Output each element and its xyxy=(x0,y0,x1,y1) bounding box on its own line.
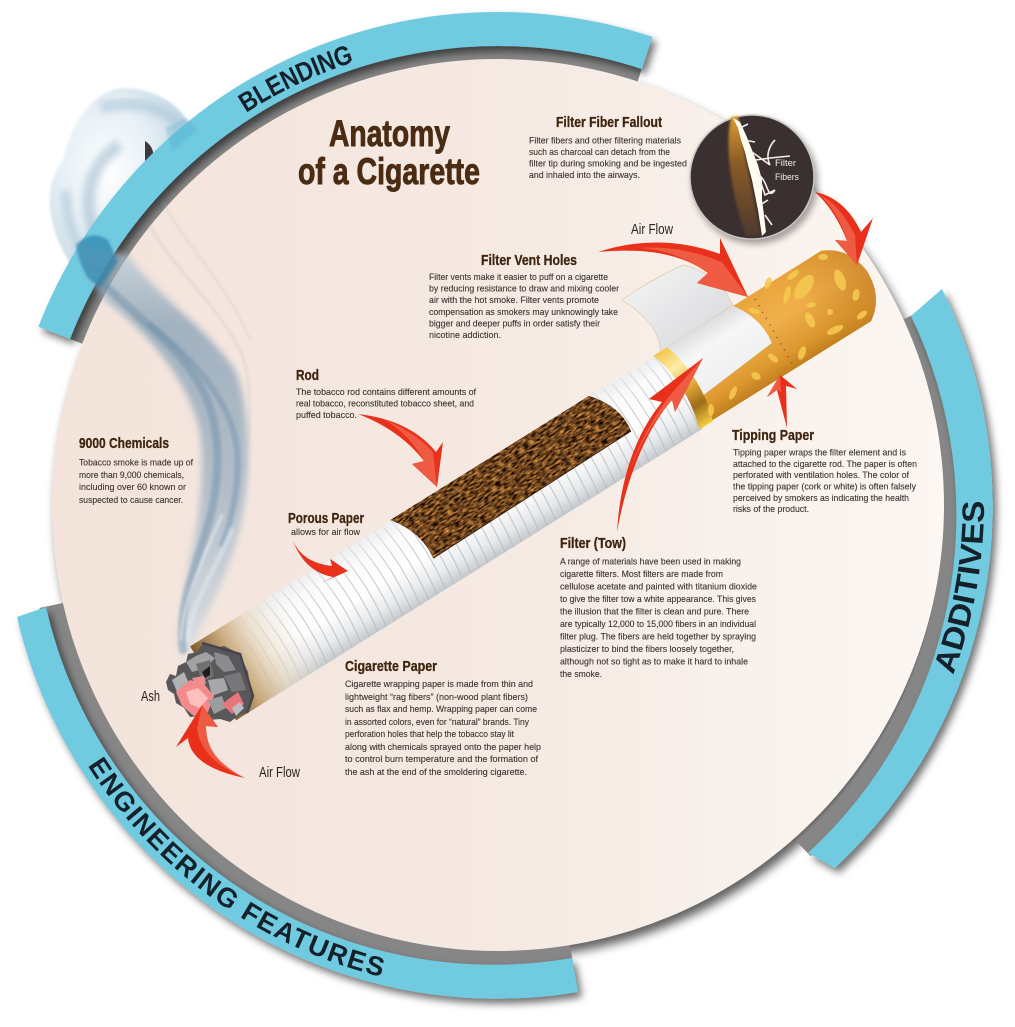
heading and text: filter fiber fallout: filter tip during smoking and be ingested xyxy=(529,158,687,170)
smoke column xyxy=(78,245,248,655)
heading and text: filter fiber fallout: Filter Fiber Fallout xyxy=(556,114,662,131)
heading and text: cigarette paper: Cigarette wrapping paper is made from thin and xyxy=(345,679,533,690)
heading and text: tipping paper xyxy=(732,427,917,515)
label: air flow top: Air Flow xyxy=(631,222,673,238)
filter fibers label: Filter xyxy=(775,158,796,169)
heading and text: filter tow: filter plug. The fibers are held together by spraying xyxy=(560,632,756,642)
heading and text: tipping paper: perforated with ventilation holes. The color of xyxy=(733,470,909,481)
heading and text: rod: real tobacco, reconstituted tobacco sheet, and xyxy=(296,398,474,410)
heading and text: filter tow: Filter (Tow) xyxy=(560,535,626,552)
heading and text: filter tow xyxy=(560,535,757,680)
heading and text: rod xyxy=(296,367,476,421)
exposed tobacco xyxy=(391,386,633,567)
heading and text: filter tow: although not so tight as to make it hard to inhale xyxy=(560,656,748,668)
title: Anatomy xyxy=(329,113,450,154)
band label: engineering features: ENGINEERING FEATURES xyxy=(88,756,384,976)
heading and text: cigarette paper xyxy=(345,658,541,778)
band: engineering features xyxy=(17,607,578,999)
heading and text: 9000 chemicals: 9000 Chemicals xyxy=(79,435,169,452)
smoke over band xyxy=(76,235,118,288)
cigarette rod paper xyxy=(190,352,707,720)
heading and text: filter tow: to give the filter tow a white appearance. This gives xyxy=(560,594,756,605)
heading and text: filter fiber fallout: and inhaled into the airways. xyxy=(529,170,640,181)
arrow: rod xyxy=(358,414,443,487)
band label: additives: ADDITIVES xyxy=(936,502,984,674)
heading and text: 9000 chemicals: suspected to cause cancer. xyxy=(79,495,183,506)
arrow: air flow to vent holes xyxy=(598,238,748,297)
heading and text: filter vent holes: air with the hot smoke. Filter vents promote xyxy=(429,295,599,306)
gold band xyxy=(653,344,719,429)
heading and text: tipping paper: Tipping Paper xyxy=(732,427,814,444)
heading and text: filter vent holes: Filter Vent Holes xyxy=(481,252,577,269)
heading and text: 9000 chemicals: including over 60 known or xyxy=(79,482,187,493)
heading and text: filter fiber fallout: Filter fibers and other filtering materials xyxy=(529,136,681,146)
label: air flow bottom: Air Flow xyxy=(259,765,300,781)
heading and text: filter tow: the illusion that the filter is clean and pure. There xyxy=(560,606,749,618)
heading and text: filter tow: plasticizer to bind the fibers loosely together, xyxy=(560,644,734,655)
heading and text: 9000 chemicals: Tobacco smoke is made up of xyxy=(79,458,193,468)
arrow: porous paper xyxy=(293,541,348,583)
heading and text: cigarette paper: lightweight “rag fibers” (non-wood plant fibers) xyxy=(345,692,528,703)
heading and text: tipping paper: perceived by smokers as indicating the health xyxy=(733,493,909,504)
inset circle: filter fibers xyxy=(690,115,818,244)
white filter tow xyxy=(660,298,777,402)
smoke streaks xyxy=(105,205,250,650)
heading and text: porous paper xyxy=(288,510,364,538)
peeled tipping paper flap xyxy=(622,265,733,353)
heading and text: filter tow: cigarette filters. Most filters are made from xyxy=(560,569,723,580)
arrow: tipping paper xyxy=(767,375,797,428)
burnt ash tip xyxy=(166,643,253,722)
heading and text: 9000 chemicals: more than 9,000 chemicals, xyxy=(79,470,184,481)
heading and text: filter vent holes: bigger and deeper puffs in order satisfy their xyxy=(429,318,601,330)
heading and text: filter tow: A range of materials have been used in making xyxy=(560,556,741,568)
heading and text: cigarette paper: in assorted colors, even for “natural” brands. Tiny xyxy=(345,717,529,728)
heading and text: cigarette paper: perforation holes that help the tobacco stay lit xyxy=(345,729,514,740)
heading and text: tipping paper: risks of the product. xyxy=(733,504,809,515)
heading and text: filter vent holes: Filter vents make it easier to puff on a cigarette xyxy=(429,272,608,283)
cork spots xyxy=(708,254,869,416)
title xyxy=(298,113,480,192)
vent holes xyxy=(755,299,793,365)
heading and text: tipping paper: Tipping paper wraps the filter element and is xyxy=(733,448,906,458)
heading and text: cigarette paper: the ash at the end of the smoldering cigarette. xyxy=(345,767,527,778)
title: of a Cigarette xyxy=(298,151,480,192)
disc shadow xyxy=(56,66,948,958)
heading and text: rod: puffed tobacco. xyxy=(296,410,357,421)
heading and text: filter vent holes: compensation as smokers may unknowingly take xyxy=(429,307,618,318)
band: blending xyxy=(38,12,652,339)
heading and text: porous paper: Porous Paper xyxy=(288,510,364,527)
heading and text: filter tow: are typically 12,000 to 15,000 fibers in an individual xyxy=(560,619,756,630)
heading and text: porous paper: allows for air flow xyxy=(291,527,360,538)
heading and text: cigarette paper: along with chemicals sprayed onto the paper help xyxy=(345,742,541,753)
cigarette illustration xyxy=(166,236,892,722)
heading and text: filter tow: the smoke. xyxy=(560,669,602,680)
filter fibers xyxy=(740,124,790,225)
filter fibers label xyxy=(775,158,799,183)
band label: blending: BLENDING xyxy=(238,46,352,112)
smoke blob behind band xyxy=(50,88,188,285)
band: additives xyxy=(808,289,993,868)
heading and text: filter vent holes: by reducing resistance to draw and mixing cooler xyxy=(429,284,620,294)
heading and text: filter fiber fallout xyxy=(529,114,687,181)
heading and text: rod: The tobacco rod contains different amounts of xyxy=(296,387,476,398)
arrow: filter tow xyxy=(617,358,703,532)
heading and text: cigarette paper: to control burn temperature and the formation of xyxy=(345,754,538,765)
label: ash: Ash xyxy=(141,689,160,705)
smoke xyxy=(76,118,250,655)
heading and text: filter fiber fallout: such as charcoal can detach from the xyxy=(529,147,670,158)
heading and text: tipping paper: attached to the cigarette rod. The paper is often xyxy=(733,459,917,470)
main circle panel xyxy=(52,59,944,951)
heading and text: rod: Rod xyxy=(296,367,319,384)
heading and text: cigarette paper: Cigarette Paper xyxy=(345,658,437,675)
heading and text: tipping paper: the tipping paper (cork or white) is often falsely xyxy=(733,482,916,492)
arrow: fibers to filter tip xyxy=(815,192,873,265)
heading and text: filter tow: cellulose acetate and painted with titanium dioxide xyxy=(560,582,757,592)
heading and text: 9000 chemicals xyxy=(79,435,193,506)
arrow: air flow to ash xyxy=(176,705,245,778)
heading and text: filter vent holes xyxy=(429,252,620,341)
heading and text: filter vent holes: nicotine addiction. xyxy=(429,330,501,341)
filter fibers label: Fibers xyxy=(775,172,799,183)
filter tipping paper xyxy=(664,236,891,422)
heading and text: cigarette paper: such as flax and hemp. Wrapping paper can come xyxy=(345,704,537,715)
